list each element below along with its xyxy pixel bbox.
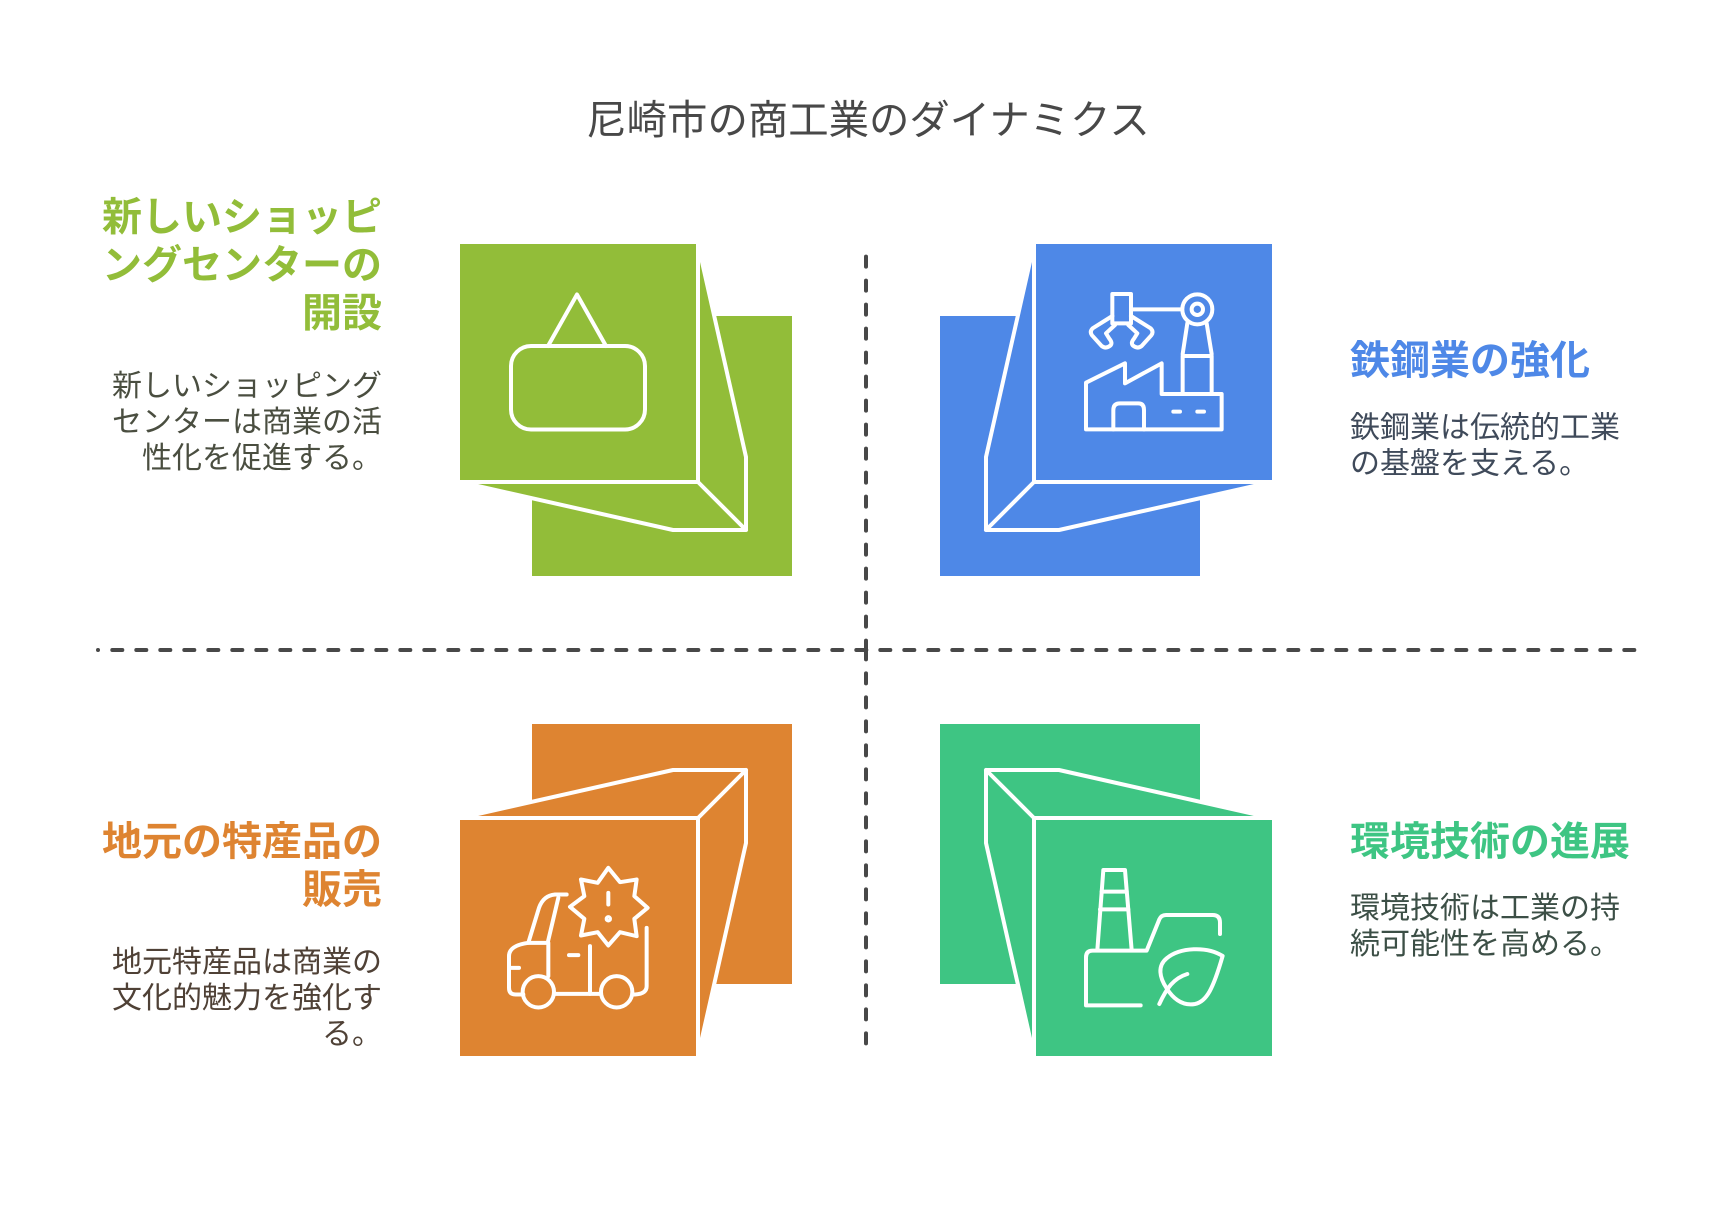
title: 尼崎市の商工業のダイナミクス	[586, 97, 1150, 143]
text: local products description: る。	[322, 1018, 382, 1051]
text: environmental technology description: 環境技術は工業の持	[1350, 892, 1620, 925]
text: shopping center description: センターは商業の活	[112, 406, 382, 439]
heading: local products: 販売	[302, 868, 382, 912]
heading: local products: 地元の特産品の	[102, 820, 382, 864]
text: local products description: 地元特産品は商業の	[112, 946, 382, 979]
panel: shopping center	[102, 196, 792, 576]
dashed quadrant dividers	[98, 257, 1634, 1043]
text: local products description: 文化的魅力を強化す	[112, 982, 382, 1015]
folded paper graphic: orange	[460, 724, 792, 1056]
heading: shopping center: 新しいショッピ	[102, 196, 382, 240]
panel: environmental technology	[940, 724, 1630, 1056]
text: steel industry description: の基盤を支える。	[1350, 448, 1589, 480]
heading: shopping center: 開設	[302, 292, 382, 336]
text: shopping center description: 性化を促進する。	[142, 442, 382, 475]
folded paper graphic: blue	[940, 244, 1272, 576]
heading: steel industry: 鉄鋼業の強化	[1350, 339, 1590, 383]
panel: local products	[102, 724, 792, 1056]
icon: shopping bag	[511, 294, 645, 430]
icon: truck with alert badge	[509, 868, 648, 1007]
heading: shopping center: ングセンターの	[102, 244, 382, 288]
folded paper graphic: green	[460, 244, 792, 576]
panel: steel industry	[940, 244, 1620, 576]
text: environmental technology description: 続可能性を高める。	[1350, 928, 1620, 961]
text: shopping center description: 新しいショッピング	[112, 370, 382, 403]
text: steel industry description: 鉄鋼業は伝統的工業	[1350, 412, 1620, 444]
icon: factory with leaf	[1086, 870, 1223, 1005]
heading: environmental technology: 環境技術の進展	[1350, 820, 1630, 864]
icon: robot arm and factory	[1086, 294, 1222, 429]
folded paper graphic: teal	[940, 724, 1272, 1056]
